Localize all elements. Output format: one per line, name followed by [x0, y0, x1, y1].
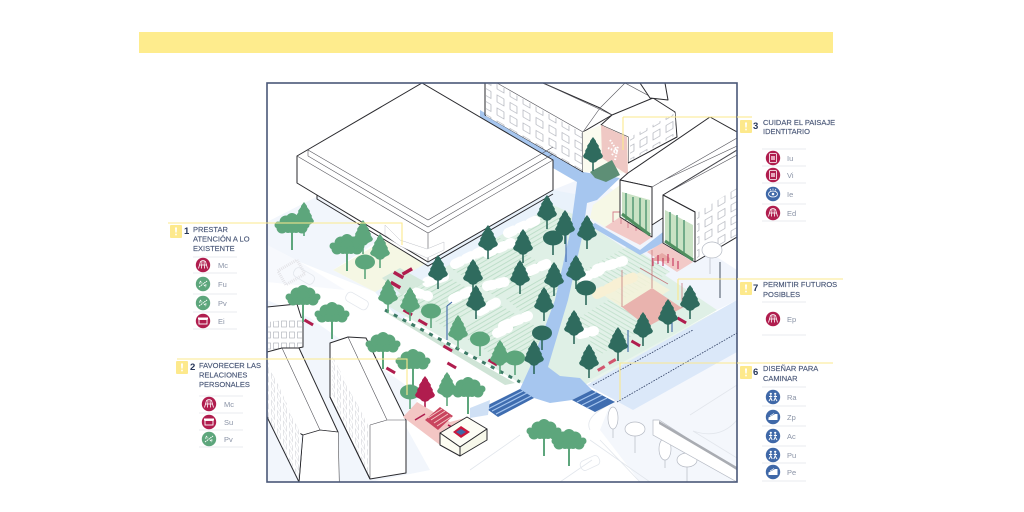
- pink mural wall: [583, 125, 628, 182]
- heading 3: IDENTITARIO: [763, 127, 810, 136]
- legend list 1: Fu: [218, 280, 227, 289]
- pale yellow courtyard: [590, 185, 620, 227]
- cream cars: [597, 277, 634, 294]
- big building: [297, 83, 553, 266]
- outlined trees: [608, 242, 722, 482]
- panel: 1 prestar atención: 1: [184, 226, 190, 237]
- legend list 3: Vi: [787, 171, 794, 180]
- metro plaza: [403, 400, 490, 456]
- street furniture: red benches: [304, 267, 687, 374]
- bottom-left buildings: [267, 304, 406, 482]
- elevated walkway: [653, 420, 737, 482]
- legend list 6: Ra: [787, 393, 797, 402]
- ground: pale sidewalks: [267, 175, 737, 482]
- panel: 2 favorecer relaciones: [176, 359, 268, 447]
- legend list 1: Pv: [218, 299, 227, 308]
- legend list 3: [762, 149, 806, 221]
- legend list 3: Ie: [787, 190, 793, 199]
- park base: [383, 205, 717, 386]
- legend list 3: Ed: [787, 209, 796, 218]
- heading 1: ATENCIÓN A LO: [193, 234, 250, 244]
- legend list 1: [193, 257, 237, 329]
- light green trees: [274, 202, 586, 466]
- parked cars: [403, 220, 623, 334]
- dark park trees: [428, 137, 700, 378]
- legend list 6: Zp: [787, 413, 796, 422]
- panel: 3 cuidar el paisaje: 3: [753, 121, 758, 132]
- blue sidewalk band: [587, 300, 737, 410]
- heading 7: PERMITIR FUTUROS: [763, 280, 837, 289]
- map frame: [267, 83, 737, 482]
- legend list 2: Mc: [224, 400, 234, 409]
- park edge shrubs: [385, 310, 520, 382]
- ghost street details: [278, 260, 737, 482]
- panel: 2 favorecer relaciones: 2: [190, 362, 195, 373]
- panel: 6 diseñar para caminar: [737, 363, 833, 481]
- legend list 6: Pu: [787, 451, 796, 460]
- heading 2: PERSONALES: [199, 380, 250, 389]
- legend list 1: Ei: [218, 317, 225, 326]
- legend list 1: Mc: [218, 261, 228, 270]
- legend list 2: Pv: [224, 435, 233, 444]
- legend list 7: Ep: [787, 315, 796, 324]
- legend list 6: Ac: [787, 432, 796, 441]
- left pocket plaza: [333, 240, 425, 295]
- heading 1: EXISTENTE: [193, 244, 235, 253]
- pink pads and sports court: [605, 212, 693, 327]
- yellow highlight boxes: [268, 117, 737, 400]
- panel: 7 permitir futuros: 7: [753, 283, 758, 294]
- legend list 6: [762, 387, 806, 481]
- panel: 1 prestar atención: [168, 223, 268, 329]
- panel: 3 cuidar el paisaje: [737, 117, 835, 221]
- heading 6: CAMINAR: [763, 374, 798, 383]
- legend list 6: Pe: [787, 468, 796, 477]
- heading 2: FAVORECER LAS: [199, 361, 261, 370]
- top banner: [139, 32, 833, 53]
- legend list 3: Iu: [787, 154, 793, 163]
- heading 6: DISEÑAR PARA: [763, 364, 818, 373]
- red tree: [415, 376, 435, 410]
- lamps: [446, 236, 721, 352]
- panel: 6 diseñar para caminar: 6: [753, 367, 758, 378]
- panel: 7 permitir futuros: [737, 279, 843, 335]
- heading 7: POSIBLES: [763, 290, 800, 299]
- top building with windows: [485, 83, 677, 172]
- crosswalks: [484, 389, 615, 417]
- heading 2: RELACIONES: [199, 370, 247, 380]
- blue street: [480, 110, 663, 403]
- heading 3: CUIDAR EL PAISAJE: [763, 118, 835, 127]
- legend list 2: Su: [224, 418, 233, 427]
- right buildings: [620, 117, 737, 262]
- heading 1: PRESTAR: [193, 225, 228, 234]
- legend list 2: [199, 396, 243, 447]
- isometric map: [267, 83, 737, 482]
